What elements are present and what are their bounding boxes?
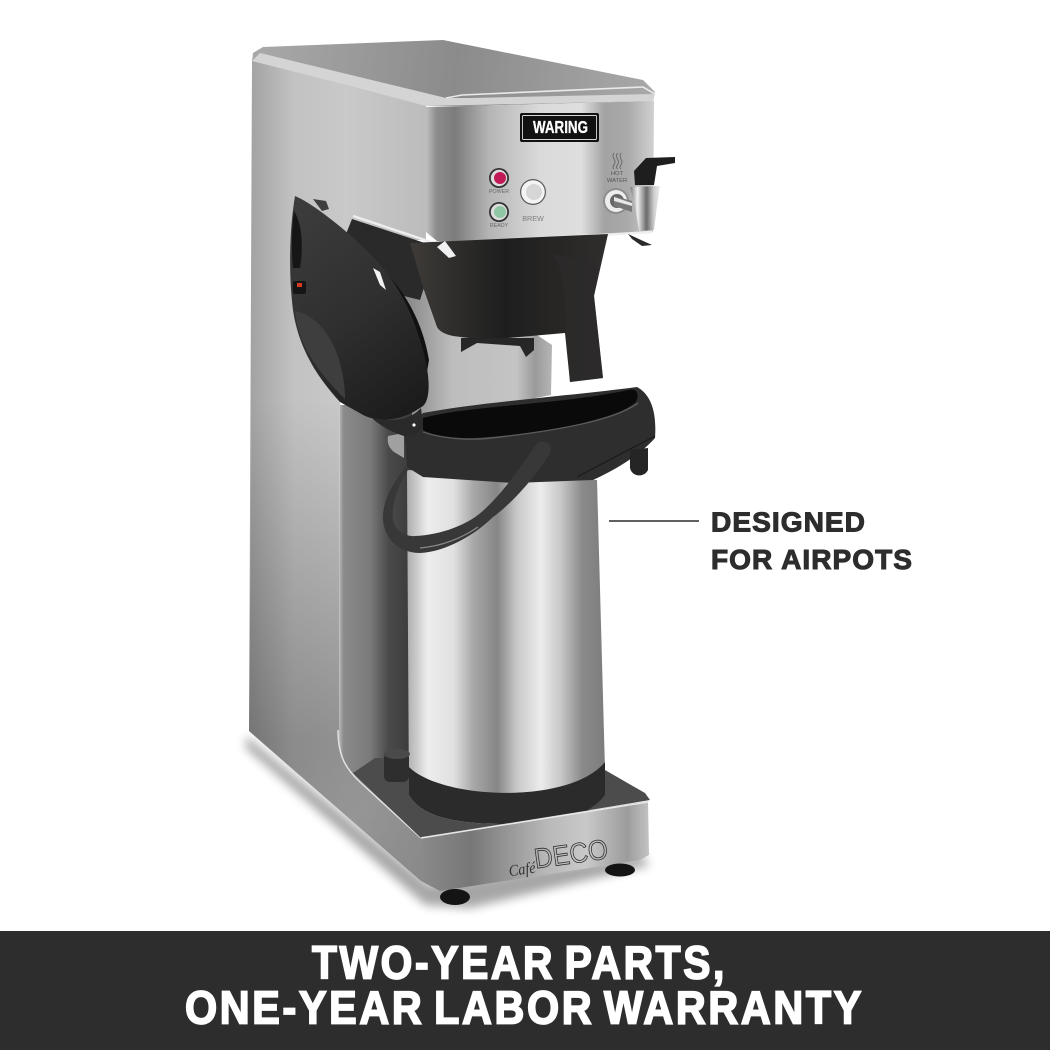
callout text: FOR AIRPOTS <box>711 544 913 575</box>
dark panel under head <box>346 219 437 300</box>
ground shadow <box>246 736 650 908</box>
foot strip on side <box>249 731 421 881</box>
tray foot <box>630 448 648 475</box>
warranty heading: TWO-YEAR PARTS, <box>312 936 727 988</box>
chrome hinge <box>388 433 404 458</box>
open brew lid <box>290 196 429 436</box>
lid hinge <box>372 408 423 436</box>
top lid surface <box>252 40 655 106</box>
Cafe Deco logo: Café <box>508 859 538 880</box>
lower silver trim <box>353 216 652 244</box>
airpot black base ring <box>408 762 605 824</box>
callout text <box>711 506 913 575</box>
warranty heading <box>185 936 864 1034</box>
coffee brewer product image <box>246 40 675 908</box>
ready light: READY <box>490 223 509 229</box>
callout leader line <box>609 520 699 522</box>
brew button: BREW <box>522 214 544 223</box>
airpot tray top <box>388 387 655 483</box>
hot water tap <box>603 157 675 231</box>
ready light <box>489 202 509 229</box>
callout: designed for airpots <box>609 506 913 575</box>
warranty heading: ONE-YEAR LABOR WARRANTY <box>185 982 864 1034</box>
sensor post on base <box>384 749 410 782</box>
stainless cylinder <box>407 470 605 800</box>
hot water label with steam icon: WATER <box>607 178 627 184</box>
callout text: DESIGNED <box>711 506 866 538</box>
brewer side panel <box>249 60 426 881</box>
Waring logo badge <box>520 113 599 142</box>
hot water label with steam icon: HOT <box>611 171 624 177</box>
recessed column behind airpot <box>339 405 421 838</box>
power light <box>489 168 509 195</box>
footer banner <box>0 931 1050 1050</box>
airpot body <box>407 470 605 824</box>
power light: POWER <box>489 189 509 195</box>
head front panel <box>426 101 654 242</box>
tray inner well <box>423 390 638 438</box>
Cafe Deco logo <box>505 833 610 880</box>
brew button <box>520 179 546 223</box>
feet <box>440 864 635 905</box>
back column behind funnel <box>345 232 552 420</box>
base front <box>421 801 649 891</box>
airpot carry handle <box>383 441 551 553</box>
base plate top <box>353 758 650 838</box>
Waring logo badge: WARING <box>533 117 588 137</box>
Cafe Deco logo: DECO <box>532 833 610 874</box>
hot water label with steam icon <box>607 153 627 184</box>
brew funnel <box>410 234 652 382</box>
